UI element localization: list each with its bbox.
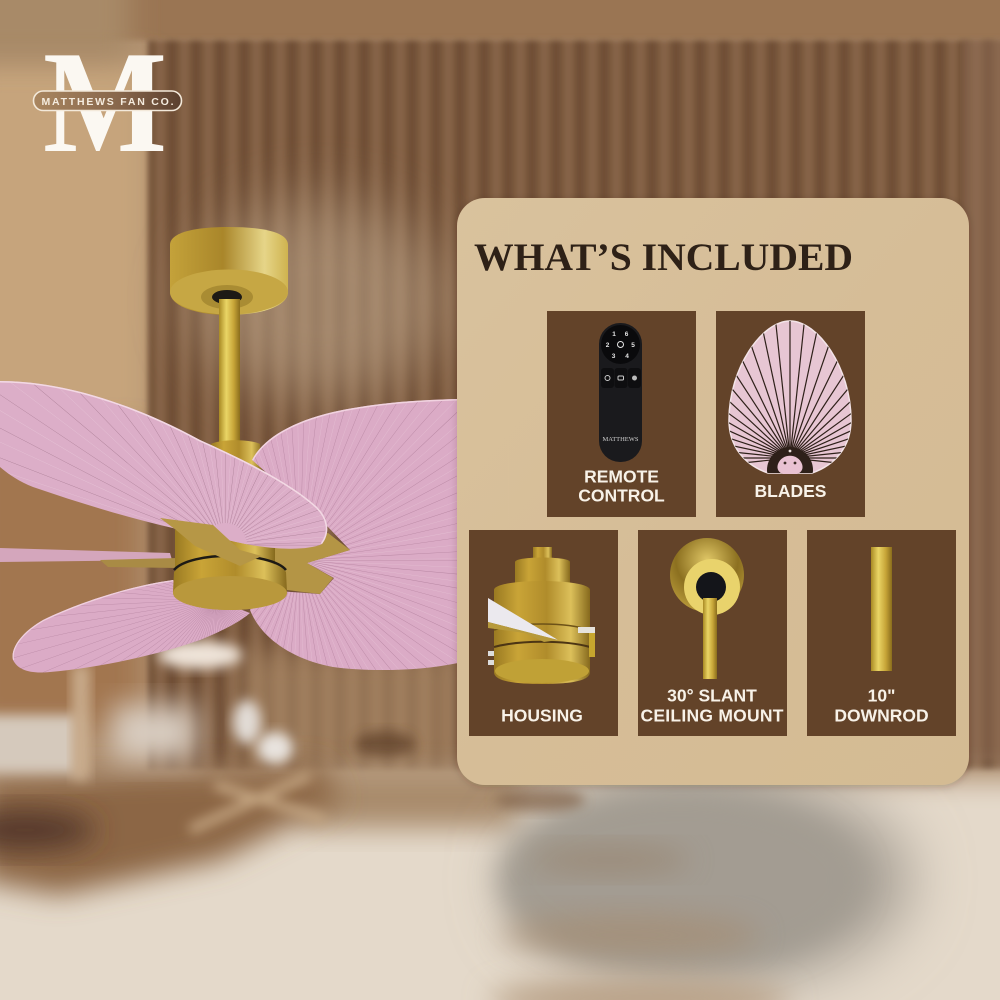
panel: what's included xyxy=(457,198,969,785)
icon: remote: 4 xyxy=(625,353,629,360)
floor xyxy=(0,765,1000,1000)
card: remote control xyxy=(547,311,696,517)
label: remote control: REMOTE xyxy=(584,466,659,486)
right blades xyxy=(250,399,457,670)
title: WHAT’S INCLUDED xyxy=(474,236,853,279)
label: blades: BLADES xyxy=(755,481,826,501)
upper left blade xyxy=(0,381,328,549)
label: housing: HOUSING xyxy=(501,706,583,726)
icon: housing xyxy=(488,547,595,684)
icon: remote: 1 xyxy=(612,331,616,338)
label: remote control: CONTROL xyxy=(578,486,665,506)
icon: downrod xyxy=(871,547,892,671)
icon: ceiling mount xyxy=(670,538,744,679)
card: downrod xyxy=(807,530,956,736)
icon: remote xyxy=(599,323,642,462)
ceiling fan illustration xyxy=(0,227,460,715)
upper left bracket xyxy=(160,518,262,566)
icon: remote: 6 xyxy=(625,331,629,338)
logo: Matthews Fan Co.: MATTHEWS FAN CO. xyxy=(42,96,174,108)
label: 30° slant ceiling mount: CEILING MOUNT xyxy=(640,706,784,726)
icon: remote: 2 xyxy=(606,342,610,349)
label: 10" downrod: DOWNROD xyxy=(834,706,929,726)
motor housing xyxy=(173,530,287,610)
icon: remote: MATTHEWS xyxy=(602,436,639,443)
fan downrod xyxy=(219,299,240,449)
label: 10" downrod xyxy=(834,686,929,726)
icon: remote: 5 xyxy=(631,342,635,349)
right bracket xyxy=(258,533,350,594)
label: remote control xyxy=(578,466,665,506)
blurred chair and furniture xyxy=(0,641,325,830)
label: 30° slant ceiling mount: 30° SLANT xyxy=(667,686,757,706)
far left bracket xyxy=(100,558,178,568)
far left blade xyxy=(0,548,172,562)
icon: remote: 3 xyxy=(612,353,616,360)
label: 30° slant ceiling mount xyxy=(640,686,784,726)
card: blades xyxy=(716,311,865,517)
label: 10" downrod: 10" xyxy=(868,686,895,706)
logo: Matthews Fan Co.: M xyxy=(43,21,167,183)
fan collar xyxy=(211,440,262,480)
card: ceiling mount xyxy=(638,530,787,736)
card: housing xyxy=(469,530,618,736)
lower left blade xyxy=(12,580,250,672)
icon: blade xyxy=(728,320,852,474)
fan canopy xyxy=(170,227,288,315)
